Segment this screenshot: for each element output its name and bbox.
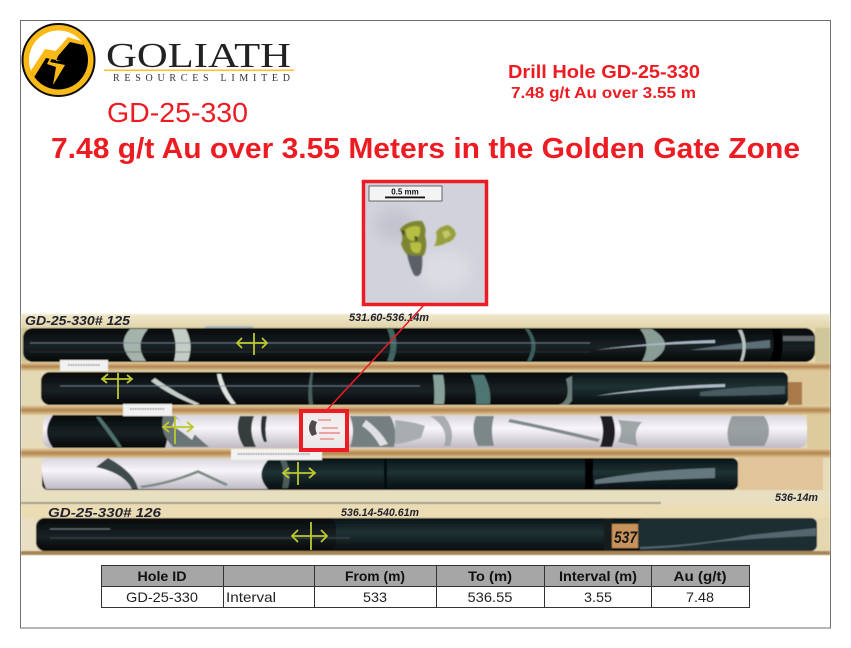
microscope inset with visible gold grains xyxy=(364,182,486,304)
handwritten labels on tray: GD-25-330# 126 xyxy=(48,505,162,520)
white sample tags xyxy=(60,360,108,371)
assay results table: 3.55 xyxy=(584,589,612,605)
core 3 xyxy=(43,415,807,448)
core 1 xyxy=(23,328,815,362)
assay results table: From (m) xyxy=(345,568,405,584)
icon: gold grain large xyxy=(400,221,426,259)
connector line from core to inset xyxy=(327,305,424,410)
handwritten labels on tray: 531.60-536.14m xyxy=(349,312,429,324)
icon: mountain and lightning bolt xyxy=(22,24,94,103)
handwritten labels on tray: 537 xyxy=(614,528,638,547)
title: 7.48 g/t Au over 3.55 Meters in the Golden Gate Zone xyxy=(51,133,800,165)
assay results table xyxy=(102,565,750,608)
assay results table: 536.55 xyxy=(468,589,513,605)
handwritten labels on tray xyxy=(25,312,818,547)
icon: gold grain small xyxy=(434,225,456,246)
handwritten labels on tray: 536.14-540.61m xyxy=(341,507,419,519)
core 2 xyxy=(41,372,788,405)
heading: drill hole summary xyxy=(508,62,700,102)
core 5 xyxy=(36,518,817,551)
wordmark: GOLIATH xyxy=(106,36,291,75)
assay results table: GD-25-330 xyxy=(126,589,198,605)
handwritten labels on tray: GD-25-330# 125 xyxy=(25,314,131,328)
assay results table: 533 xyxy=(363,589,387,605)
assay results table: To (m) xyxy=(468,568,512,584)
green depth crosses xyxy=(102,333,327,550)
logo: RESOURCES LIMITED xyxy=(113,73,290,84)
core tray photograph xyxy=(21,312,830,555)
heading: drill hole summary: 7.48 g/t Au over 3.55 m xyxy=(511,85,696,102)
assay results table: Au (g/t) xyxy=(674,568,726,584)
core 4 xyxy=(42,458,738,490)
scale bar: 0.5 mm xyxy=(391,188,419,196)
core highlight box xyxy=(301,411,347,450)
handwritten labels on tray: 536-14m xyxy=(775,492,818,504)
heading: drill hole summary: Drill Hole GD-25-330 xyxy=(508,62,700,82)
assay results table: Hole ID xyxy=(138,568,186,584)
assay results table: Interval (m) xyxy=(559,568,637,584)
assay results table: Interval xyxy=(226,589,276,605)
assay results table: 7.48 xyxy=(686,589,714,605)
logo xyxy=(22,24,294,103)
heading: hole id: GD-25-330 xyxy=(107,97,248,128)
